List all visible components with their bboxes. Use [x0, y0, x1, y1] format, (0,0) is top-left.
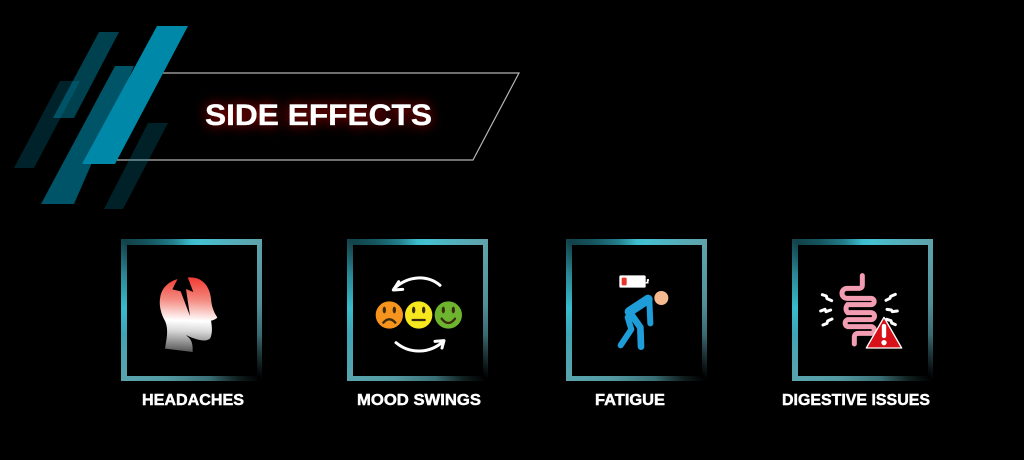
panel: mood swings frame [347, 239, 488, 381]
panel: digestive issues frame [792, 239, 933, 381]
panel: fatigue frame [566, 239, 707, 381]
title banner: SIDE EFFECTS [205, 99, 432, 132]
label: headaches: HEADACHES [142, 392, 244, 409]
label: fatigue: FATIGUE [595, 392, 665, 409]
icon: tired person with low battery [618, 275, 668, 350]
icon: head with lightning bolt [160, 277, 218, 352]
label: mood swings: MOOD SWINGS [357, 392, 481, 409]
panel: headaches frame [121, 239, 262, 381]
label: digestive issues: DIGESTIVE ISSUES [782, 392, 930, 409]
icon: mood faces with cycle arrows [376, 276, 462, 352]
icon: intestines with warning sign [819, 273, 902, 349]
